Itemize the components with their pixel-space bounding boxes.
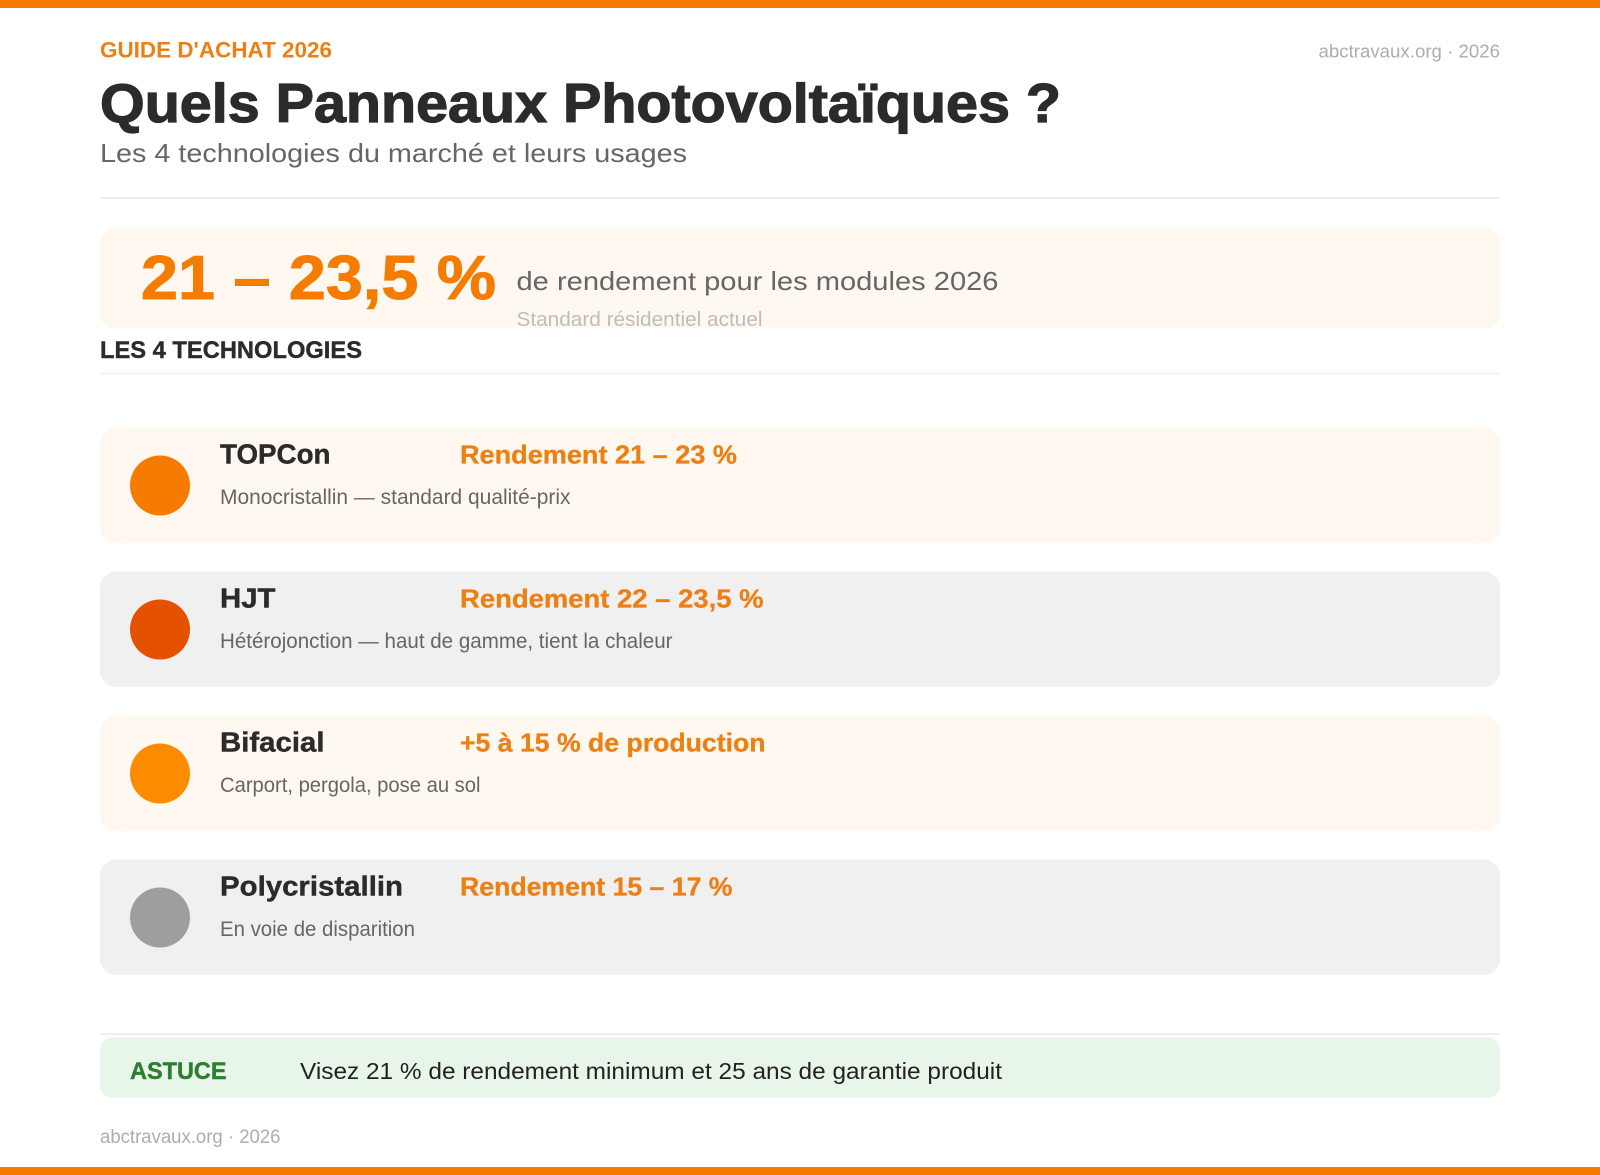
icon: TOPCon dot [130, 456, 190, 516]
key figure note: Standard résidentiel actuel [516, 309, 762, 331]
HJT name: HJT [220, 582, 276, 614]
icon: Bifacial dot [130, 744, 190, 804]
top accent bar [0, 0, 1600, 8]
Polycristallin yield: Rendement 15 – 17 % [460, 872, 732, 902]
panel: Polycristallin [100, 860, 1500, 975]
eyebrow: guide d'achat: GUIDE D'ACHAT 2026 [100, 38, 332, 62]
bottom accent bar [0, 1167, 1600, 1175]
Bifacial gain: +5 à 15 % de production [460, 728, 766, 758]
title: Quels Panneaux Photovoltaïques ? [100, 72, 1061, 134]
panel: HJT [100, 572, 1500, 687]
icon: HJT dot [130, 600, 190, 660]
Polycristallin description: En voie de disparition [220, 918, 415, 941]
tip text: Visez 21 % de rendement minimum et 25 ans de garantie produit [300, 1058, 1003, 1084]
Bifacial description: Carport, pergola, pose au sol [220, 774, 480, 797]
tip label: ASTUCE [130, 1058, 226, 1085]
HJT yield: Rendement 22 – 23,5 % [460, 584, 764, 614]
panel: Bifacial [100, 716, 1500, 831]
key figure label: de rendement pour les modules 2026 [516, 266, 998, 296]
Polycristallin name: Polycristallin [220, 870, 403, 902]
section heading: LES 4 TECHNOLOGIES [100, 337, 362, 364]
source top right: abctravaux.org · 2026 [1318, 42, 1500, 62]
TOPCon description: Monocristallin — standard qualité-prix [220, 486, 571, 509]
TOPCon name: TOPCon [220, 438, 330, 470]
key figure value: 21 – 23,5 % [141, 244, 496, 313]
icon: Polycristallin dot [130, 888, 190, 948]
footer source: abctravaux.org · 2026 [100, 1127, 280, 1148]
Bifacial name: Bifacial [220, 726, 324, 758]
panel: tip [100, 1038, 1500, 1098]
panel: TOPCon [100, 428, 1500, 543]
HJT description: Hétérojonction — haut de gamme, tient la chaleur [220, 630, 672, 653]
subtitle: Les 4 technologies du marché et leurs usages [100, 138, 687, 168]
TOPCon yield: Rendement 21 – 23 % [460, 440, 737, 470]
panel: key figure [100, 228, 1500, 331]
